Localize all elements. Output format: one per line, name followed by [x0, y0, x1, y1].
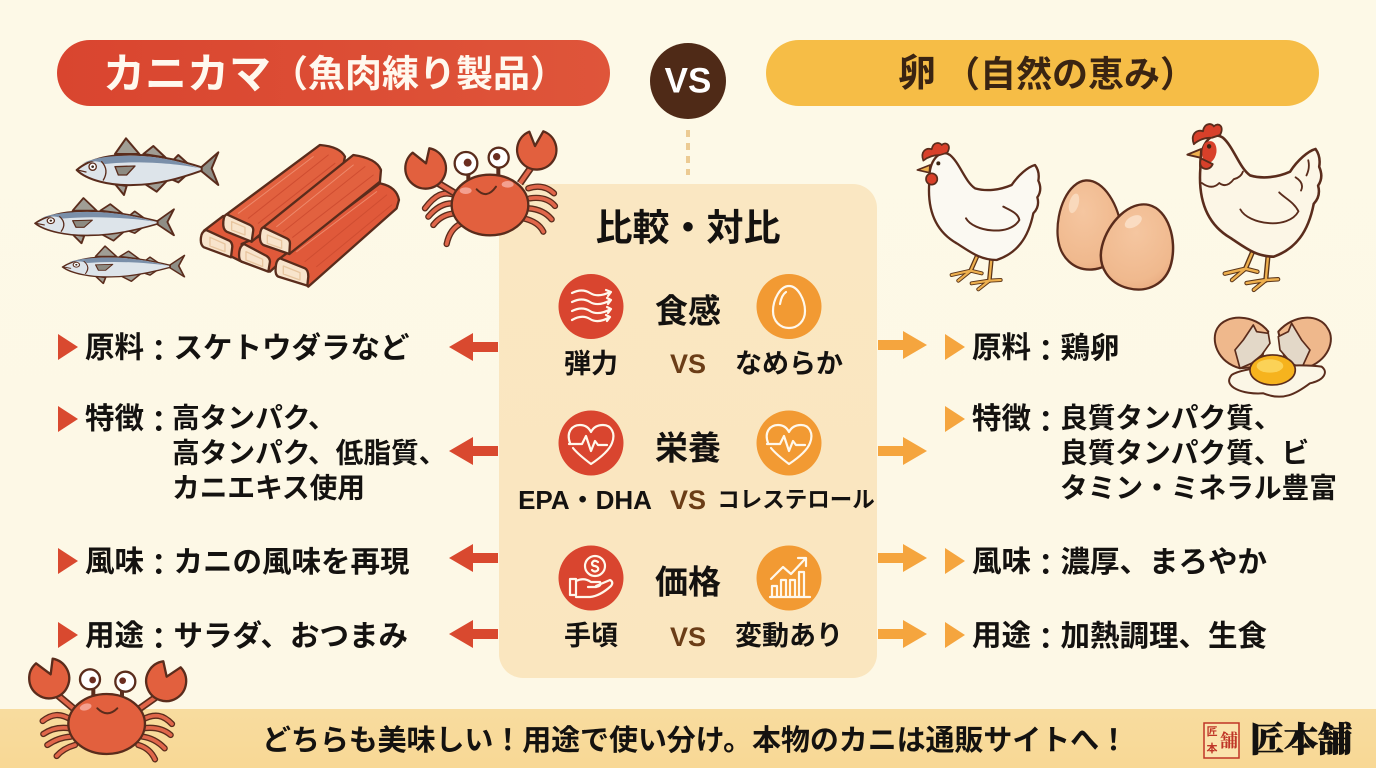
item: uses: ： [144, 622, 174, 656]
item: uses: 用途 [85, 620, 144, 652]
item: flavor: 風味 [85, 546, 144, 578]
item: uses: 用途 [972, 620, 1031, 652]
footer band [0, 709, 1376, 768]
row: nutrition [518, 410, 875, 515]
icon: red seal: 匠 [1206, 725, 1218, 738]
item: raw material: スケトウダラなど [174, 330, 410, 364]
icon: elastic waves [558, 274, 624, 339]
header: egg: （自然の恵み） [944, 54, 1196, 94]
item: characteristics: タミン・ミネラル豊富 [1060, 472, 1337, 504]
icon: crab sticks [201, 145, 399, 287]
item: flavor: ： [1031, 548, 1061, 582]
item: characteristics: 高タンパク、低脂質、 [172, 438, 446, 468]
icon: hen right [1187, 124, 1321, 290]
item: raw material: 原料 [972, 332, 1031, 364]
row: nutrition: VS [670, 485, 706, 515]
item: raw material: ： [144, 334, 174, 368]
icon: red seal: 舗 [1220, 727, 1238, 753]
item: flavor [945, 546, 1267, 582]
item: characteristics: ： [1031, 406, 1061, 438]
row: texture: 弾力 [564, 349, 618, 379]
item: characteristics [945, 402, 1337, 504]
icon: three fish [35, 138, 218, 283]
row: texture [558, 274, 843, 379]
icon: rising chart [756, 546, 822, 610]
arrows: left [449, 333, 498, 648]
item: uses [945, 620, 1267, 656]
row: texture: VS [670, 349, 706, 379]
row: price: VS [670, 622, 706, 652]
item: characteristics: 特徴 [972, 402, 1031, 436]
item: raw material: 原料 [85, 332, 144, 364]
icon: heart pulse red [558, 410, 624, 476]
VS badge [650, 43, 726, 119]
VS badge: VS [665, 62, 711, 100]
footer message: どちらも美味しい！用途で使い分け。本物のカニは通販サイトへ！ [262, 724, 1128, 757]
header: egg: 卵 [898, 53, 936, 95]
row: texture: なめらか [735, 349, 843, 379]
item: characteristics: 良質タンパク質、ビ [1060, 438, 1309, 468]
item: flavor: 濃厚、まろやか [1061, 546, 1267, 578]
header: kanikama: カニカマ [103, 50, 271, 98]
icon: heart pulse orange [756, 410, 822, 476]
item: raw material [58, 330, 410, 368]
item: characteristics: 高タンパク、 [172, 402, 336, 434]
item: characteristics [58, 402, 446, 504]
icon: red seal [1204, 723, 1239, 758]
icon: two eggs [1054, 178, 1184, 297]
item: uses: サラダ、おつまみ [174, 618, 408, 652]
header: kanikama [57, 40, 610, 106]
row: price: 変動あり [735, 621, 843, 651]
item: characteristics: カニエキス使用 [172, 472, 365, 504]
icon: crab bottom [29, 659, 186, 759]
item: uses [58, 618, 408, 656]
row: price: 手頃 [564, 621, 618, 651]
item: raw material: ： [1031, 334, 1061, 368]
panel title: 比較・対比 [596, 208, 780, 248]
item: flavor: 風味 [972, 546, 1031, 578]
item: flavor: カニの風味を再現 [174, 546, 410, 578]
item: characteristics: ： [144, 406, 174, 438]
header: egg [766, 40, 1319, 106]
list: egg features [945, 332, 1337, 656]
icon: hen left [917, 143, 1040, 289]
icon: red seal: 本 [1206, 741, 1218, 755]
item: uses: ： [1031, 622, 1061, 656]
icon: crab top [405, 131, 556, 244]
row: nutrition: コレステロール [717, 488, 875, 512]
row: price: 価格 [655, 564, 721, 600]
item: characteristics: 良質タンパク質、 [1060, 402, 1282, 434]
header: kanikama: （魚肉練り製品） [271, 54, 567, 94]
item: raw material: 鶏卵 [1061, 332, 1120, 364]
logo: takumi honpo [1204, 722, 1352, 760]
icon: egg outline [756, 274, 822, 339]
item: flavor: ： [144, 548, 174, 582]
row: price [558, 546, 843, 652]
arrows: right [878, 331, 927, 648]
item: characteristics: 特徴 [85, 402, 144, 436]
panel: comparison center [499, 184, 877, 678]
list: kanikama features [58, 330, 446, 656]
row: nutrition: 栄養 [655, 430, 721, 466]
row: texture: 食感 [655, 292, 721, 330]
item: raw material [945, 332, 1120, 368]
row: nutrition: EPA・DHA [518, 485, 652, 515]
item: uses: 加熱調理、生食 [1061, 620, 1267, 652]
brand name: 匠本舗 [1250, 722, 1352, 760]
icon: hand and coin [558, 546, 624, 610]
icon: cracked egg [1215, 318, 1331, 397]
item: flavor [58, 546, 410, 582]
